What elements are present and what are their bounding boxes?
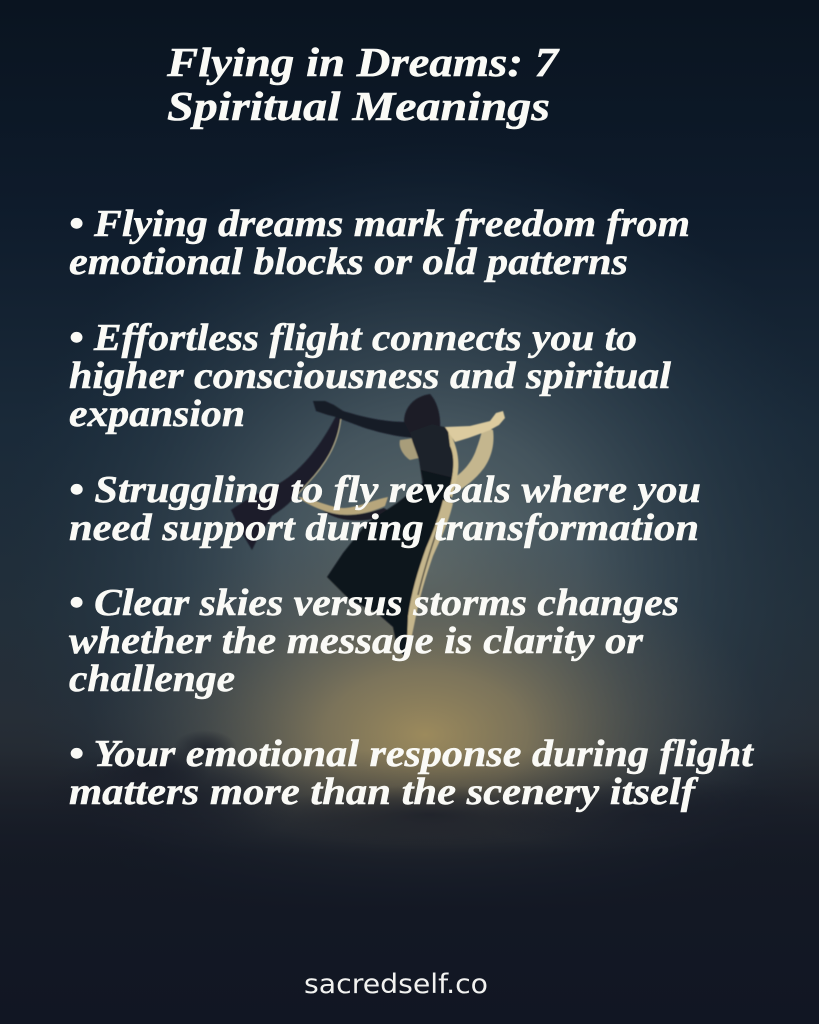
bullet: struggling: need support during transformation — [69, 507, 699, 549]
scarf lit edge — [298, 418, 341, 494]
title: Flying in Dreams: 7 — [166, 39, 560, 85]
bullet: effortless flight — [69, 317, 671, 435]
bullet: emotional response: matters more than the scenery itself — [69, 771, 699, 813]
right pale scarf — [454, 427, 494, 492]
bullet: emotional response — [69, 733, 755, 813]
bullet: effortless flight: higher consciousness and spiritual — [69, 355, 671, 397]
bullet: freedom: • Flying dreams mark freedom from — [69, 203, 690, 245]
torso — [410, 424, 458, 500]
bullet: freedom — [69, 203, 690, 283]
bullet: skies versus storms: whether the message is clarity or — [69, 620, 644, 662]
title: Spiritual Meanings — [167, 83, 550, 129]
left hand — [313, 401, 343, 418]
bullet: emotional response: • Your emotional response during flight — [69, 733, 755, 775]
bullet: struggling: • Struggling to fly reveals where you — [69, 469, 701, 511]
left arm — [338, 410, 420, 438]
lit leg edge — [407, 500, 453, 642]
bullet: struggling — [69, 469, 701, 549]
footer: website: sacredself.co — [304, 969, 488, 1000]
dress — [327, 470, 454, 657]
title — [166, 39, 560, 129]
bullet: skies versus storms: challenge — [69, 658, 235, 700]
left dark scarf — [231, 416, 341, 550]
bullet: effortless flight: • Effortless flight connects you to — [69, 317, 637, 359]
illustration: flying woman silhouette — [231, 394, 505, 657]
lit hair — [400, 438, 419, 460]
bullet: skies versus storms: • Clear skies versus storms changes — [69, 582, 679, 624]
bullet: skies versus storms — [69, 582, 679, 700]
bullet: effortless flight: expansion — [69, 393, 245, 435]
head — [404, 394, 440, 440]
dark clouds along the horizon — [40, 730, 819, 855]
lit right arm — [445, 411, 505, 442]
tan sash — [298, 497, 388, 515]
lit side of torso — [448, 430, 458, 498]
bullet: freedom: emotional blocks or old patterns — [69, 241, 628, 283]
